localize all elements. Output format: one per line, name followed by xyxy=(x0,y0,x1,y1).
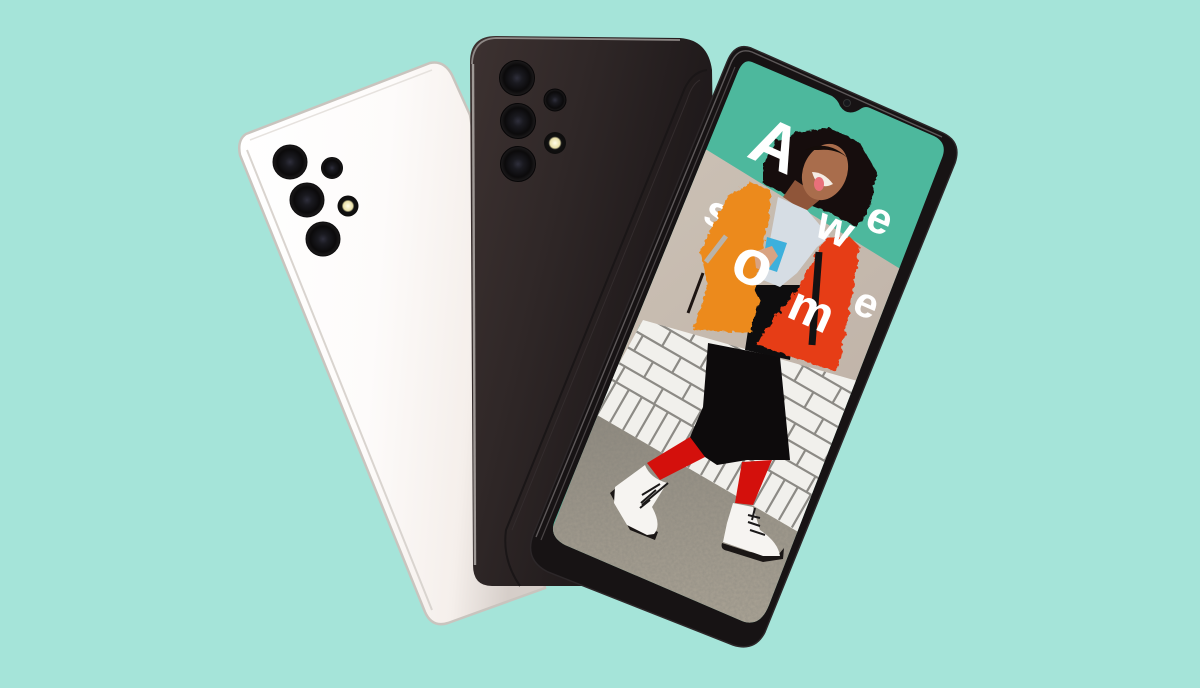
right boot laces xyxy=(748,508,765,535)
hair xyxy=(763,128,877,227)
selfie camera xyxy=(844,100,850,106)
black phone body xyxy=(470,36,714,586)
white top xyxy=(763,197,830,287)
letter s behind person: s xyxy=(697,185,739,240)
hair fringe xyxy=(814,146,847,158)
left boot sole xyxy=(610,488,658,540)
brick mortar lines xyxy=(598,324,852,528)
black phone flash xyxy=(544,132,566,154)
brick wall xyxy=(592,320,875,535)
bezel edge highlight xyxy=(536,51,942,537)
face xyxy=(802,144,848,200)
hanging cord xyxy=(688,273,703,313)
illustration: three phones fanned out on mint background xyxy=(238,36,958,648)
white phone main camera lenses xyxy=(273,145,342,256)
letter m: m xyxy=(780,275,844,344)
red jacket right xyxy=(757,237,860,372)
letter A: A xyxy=(740,101,813,188)
neck xyxy=(783,180,820,210)
letter e behind person, lower: e xyxy=(847,277,887,329)
phone: white back xyxy=(239,62,545,624)
jacket strap xyxy=(812,252,819,345)
black phone left metal edge xyxy=(473,64,475,565)
orange jacket left xyxy=(693,182,770,333)
letter o: o xyxy=(721,222,786,304)
hand xyxy=(754,246,778,270)
screen photo xyxy=(552,61,944,623)
black phone curved crease xyxy=(505,70,707,586)
screen beige wall xyxy=(610,150,900,392)
white phone body xyxy=(239,62,545,624)
right boot xyxy=(723,503,780,556)
back leg xyxy=(647,437,705,480)
front phone bezel xyxy=(531,47,957,647)
skirt xyxy=(690,343,790,465)
front leg xyxy=(735,460,772,505)
letter e behind person, upper: e xyxy=(859,191,901,246)
black phone metallic side xyxy=(472,38,680,64)
left boot laces xyxy=(640,483,668,508)
screen teal wall xyxy=(552,61,944,623)
left boot xyxy=(614,465,667,535)
concrete grain xyxy=(555,432,793,622)
black phone crease highlight xyxy=(512,80,700,530)
letter w: w xyxy=(808,196,863,259)
phone: black back xyxy=(470,36,714,586)
trousers under jacket xyxy=(745,285,800,360)
white phone left edge highlight xyxy=(247,150,432,610)
phone: front with screen xyxy=(530,40,960,647)
mouth xyxy=(812,172,833,186)
white phone flash xyxy=(338,196,358,216)
tongue xyxy=(814,177,824,191)
blue cup xyxy=(765,237,787,272)
white phone top edge highlight xyxy=(250,70,432,140)
bezel inner highlight xyxy=(541,67,735,540)
black phone camera lenses xyxy=(500,60,566,182)
jacket lining xyxy=(706,236,726,262)
right boot sole xyxy=(722,543,784,562)
concrete ground xyxy=(552,416,798,623)
person xyxy=(610,128,877,562)
